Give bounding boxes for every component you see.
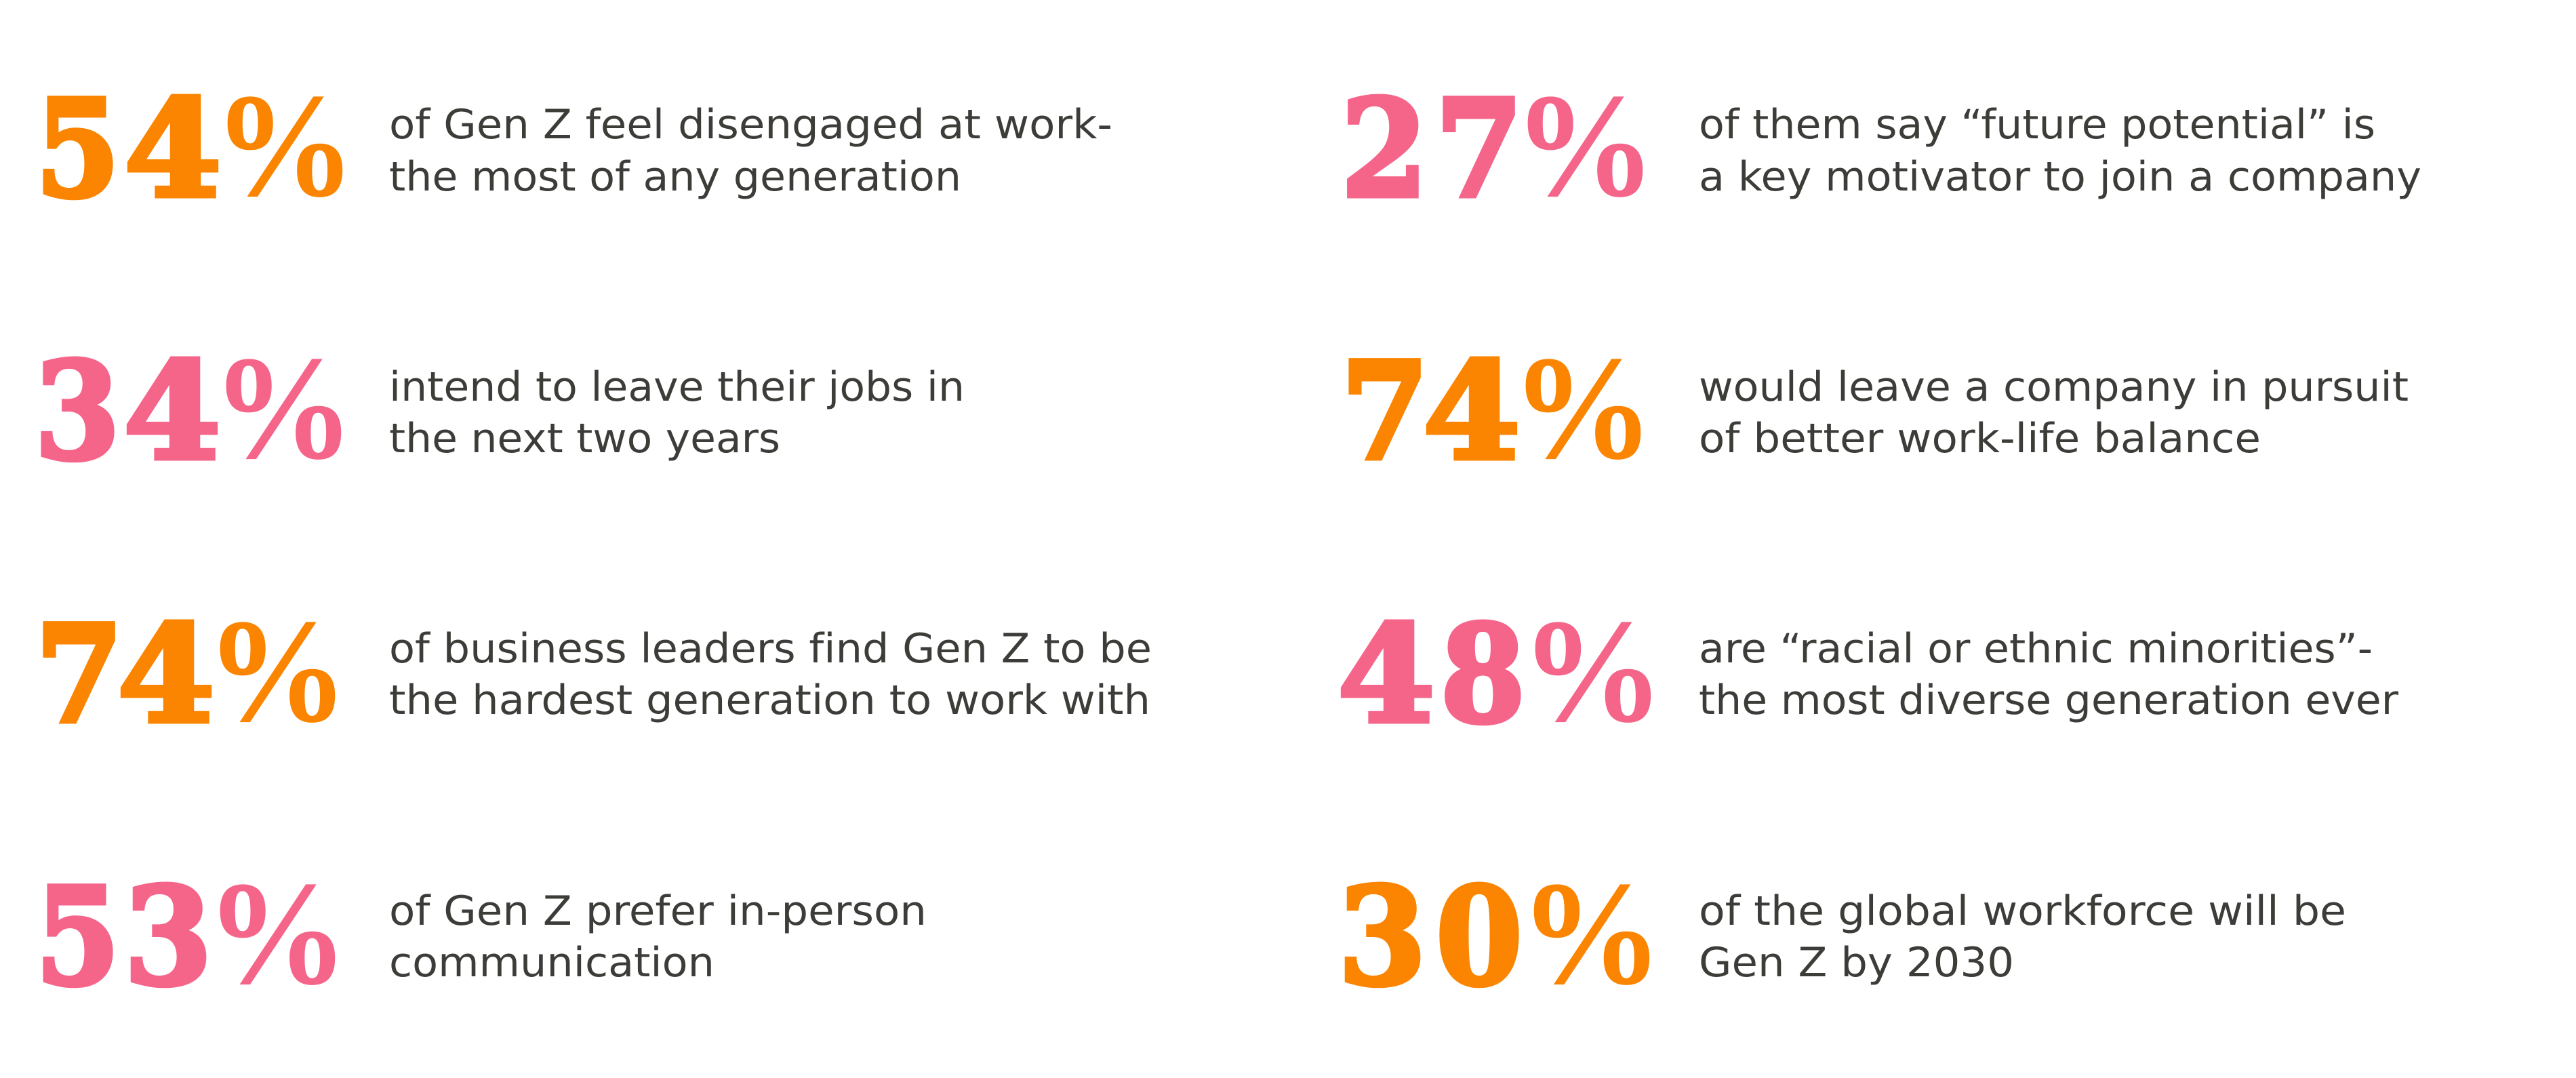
number: 54%: 5 [35,70,120,228]
description: in-person communication: communication [389,939,715,986]
number: 53%: 3 [124,858,212,1016]
description: global workforce: Gen Z by 2030 [1699,939,2014,986]
stat: 53% in-person communication [35,852,927,1016]
description: future potential: a key motivator to join a company [1699,153,2421,201]
description: work-life balance: of better work-life balance [1699,415,2261,462]
number: 74%: % [205,589,348,753]
number: 74%: 7 [35,595,123,753]
description: work-life balance: would leave a company in pursuit [1699,363,2409,411]
description: intend to leave: intend to leave their jobs in [389,363,965,411]
number: 27%: % [1513,64,1656,228]
number: 30%: 0 [1436,858,1523,1016]
number: 53%: % [205,852,348,1016]
description: global workforce: of the global workforce will be [1699,887,2346,935]
number: 48%: % [1521,589,1664,753]
description: most diverse generation: are “racial or ethnic minorities”- [1699,625,2373,673]
description: disengaged at work: the most of any generation [389,153,961,201]
description: hardest generation: of business leaders find Gen Z to be [389,625,1152,673]
number: 74%: 4 [1423,332,1521,490]
number: 54%: 4 [124,70,222,228]
number: 48%: 8 [1441,595,1525,753]
stat: 74% work-life balance [1341,326,2409,490]
number: 34%: % [212,326,355,490]
number: 30%: % [1519,852,1663,1016]
description: intend to leave: the next two years [389,415,780,462]
description: most diverse generation: the most diverse generation ever [1699,677,2398,724]
number: 30%: 3 [1338,858,1426,1016]
stat: 48% diverse [1337,589,2398,753]
number: 34%: 4 [123,332,221,490]
stat: 54% disengaged [35,64,1112,228]
number: 48%: 4 [1337,595,1435,753]
stat: 27% future potential [1341,64,2421,228]
number: 27%: 7 [1435,70,1523,228]
number: 54%: % [213,64,356,228]
number: 27%: 2 [1341,70,1428,228]
description: in-person communication: of Gen Z prefer in-person [389,887,927,935]
number: 34%: 3 [35,332,120,490]
number: 74%: 4 [117,595,215,753]
number: 74%: % [1511,326,1654,490]
stat: 34% intend to leave [35,326,965,490]
description: future potential: of them say “future potential” is [1699,101,2375,148]
number: 53%: 5 [35,858,120,1016]
number: 74%: 7 [1341,332,1429,490]
description: disengaged at work: of Gen Z feel disengaged at work- [389,101,1112,148]
stat: 74% hardest generation [35,589,1152,753]
description: hardest generation: the hardest generation to work with [389,677,1150,724]
stat: 30% global workforce [1338,852,2346,1016]
